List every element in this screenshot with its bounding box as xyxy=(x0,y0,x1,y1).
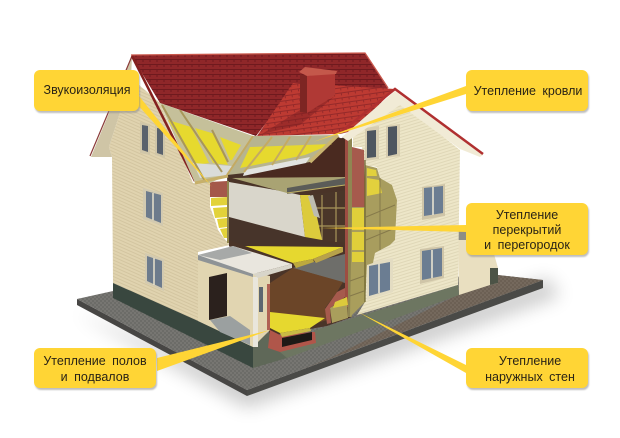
pointer: outer walls xyxy=(358,312,466,373)
roof cut left: insulation xyxy=(160,103,253,183)
left wall siding xyxy=(109,78,230,321)
right plinth xyxy=(280,285,459,358)
callout: floors and partitions: перекрытий xyxy=(493,223,561,237)
callout: outer walls: Утепление xyxy=(499,354,561,368)
callout: outer walls xyxy=(466,348,589,390)
callout: sound insulation xyxy=(34,70,140,113)
left wall insulation and brick xyxy=(210,181,229,243)
callout: floors and basements: Утепление полов xyxy=(43,354,147,368)
lower room xyxy=(270,254,345,323)
ground slab xyxy=(77,275,543,396)
brick wall strip xyxy=(345,137,365,317)
right wall windows xyxy=(365,124,445,300)
pointer: floors and basements xyxy=(157,330,270,371)
left wall windows xyxy=(140,122,165,291)
dormer roof shadow xyxy=(262,96,335,134)
left gable eave xyxy=(90,56,132,157)
wall insulation panels xyxy=(350,160,397,317)
callout: floors and basements xyxy=(34,348,157,390)
callout: floors and partitions: и перегородок xyxy=(484,238,570,252)
middle floor insulation xyxy=(245,246,343,268)
callout: roof insulation: Утепление кровли xyxy=(474,84,582,98)
interior backdrop xyxy=(227,137,352,336)
callout: outer walls: наружных стен xyxy=(485,370,575,384)
ground shadow xyxy=(75,278,560,408)
left roof edge xyxy=(132,56,195,181)
chimney xyxy=(299,67,337,113)
pointer: floors and partitions xyxy=(320,225,466,232)
callout: floors and partitions: Утепление xyxy=(496,208,558,222)
callout: roof insulation xyxy=(466,70,589,113)
left plinth xyxy=(113,283,253,368)
callout: sound insulation: Звукоизоляция xyxy=(44,83,130,97)
roof cut right: insulation xyxy=(227,135,338,176)
porch xyxy=(198,246,292,347)
callout: floors and basements: и подвалов xyxy=(61,370,130,384)
right wall siding xyxy=(353,102,460,315)
roof top edge xyxy=(131,53,388,88)
callout: floors and partitions xyxy=(466,203,589,257)
basement xyxy=(268,288,348,352)
corner plinth xyxy=(253,332,287,368)
right gable eave xyxy=(342,89,483,157)
pointer: roof insulation xyxy=(313,86,466,142)
dormer roof xyxy=(257,83,395,136)
upper room xyxy=(229,137,345,246)
annex at right xyxy=(458,227,498,295)
pointer: sound insulation xyxy=(136,96,212,187)
main roof xyxy=(131,53,390,136)
